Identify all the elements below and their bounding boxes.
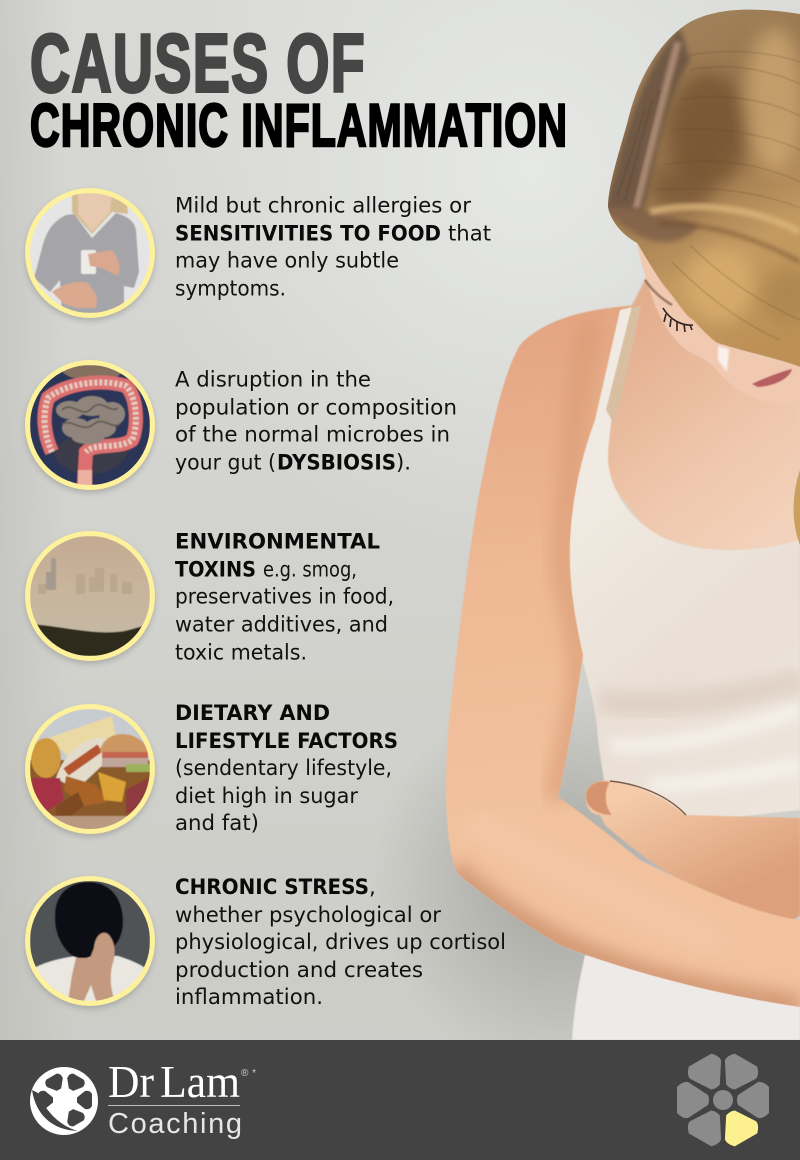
text: item 3: preservatives in food, (175, 584, 394, 610)
text: item 1: may have only subtle (175, 248, 399, 274)
text: item 5: , (369, 875, 376, 900)
text: item 2: ). (396, 450, 411, 475)
text: item 2: population or composition (175, 395, 457, 420)
text: item 4: diet high in sugar (175, 784, 358, 809)
woman: eyelashes (663, 308, 693, 332)
title line: chronic inflammation: CHRONIC INFLAMMATION (30, 92, 568, 159)
item 3: environmental toxins (25, 530, 394, 666)
icon: Dr Lam flower disc (30, 1067, 98, 1135)
woman: shoulder, arm and front forearm (446, 305, 800, 1007)
icon: woman with glass of milk (25, 188, 155, 321)
icon: stressed person holding head (25, 876, 155, 1009)
text: item 2: of the normal microbes in (175, 422, 450, 447)
text: item 3: toxic metals. (175, 640, 307, 666)
icon: colon and intestines (25, 360, 155, 493)
item 4: dietary and lifestyle factors (25, 701, 398, 837)
text: item 1: symptoms. (175, 276, 286, 302)
woman: nose highlight (718, 346, 729, 372)
text: item 4: and fat) (175, 811, 259, 836)
text: item 3: TOXINS (175, 558, 256, 582)
text: item 4: LIFESTYLE FACTORS (175, 729, 398, 754)
text: item 2: DYSBIOSIS (277, 450, 396, 475)
woman: hair lock on right edge (794, 470, 800, 545)
text: item 5: whether psychological or (175, 903, 441, 928)
woman: lips (752, 369, 792, 387)
text: item 3 (175, 530, 394, 666)
text: item 3: water additives, and (175, 612, 388, 638)
woman: top waist shadow (600, 680, 800, 704)
title (30, 16, 568, 159)
text: item 2 (175, 367, 457, 475)
text: item 5: production and creates (175, 958, 423, 983)
text: item 5 (175, 875, 506, 1010)
text: item 3: e.g. smog, (263, 558, 357, 582)
woman: brow (645, 280, 672, 305)
text: item 4 (175, 701, 398, 836)
text: item 2: A disruption in the (175, 367, 371, 392)
text: item 4: DIETARY AND (175, 701, 330, 726)
woman: hidden forearm and hand (586, 780, 800, 921)
item 2: dysbiosis (25, 360, 457, 493)
woman: top folds (610, 710, 800, 785)
text: item 5: CHRONIC STRESS (175, 875, 369, 900)
logo: Dr Lam Coaching (30, 1056, 256, 1140)
woman: bra strap (606, 306, 641, 424)
logo text: Coaching: Coaching (108, 1108, 242, 1140)
woman: tank top (570, 306, 800, 822)
woman: chest and neck (590, 270, 800, 556)
text: item 5: physiological, drives up cortisol (175, 930, 506, 955)
woman: hair (600, 0, 800, 380)
icon: smog over city (25, 531, 155, 664)
text: item 1: SENSITIVITIES TO FOOD (175, 222, 441, 246)
logo text: Dr Lam: Dr Lam (108, 1056, 240, 1107)
text: item 2: your gut ( (175, 450, 276, 475)
text: item 1 (175, 194, 491, 302)
item 1: food sensitivities (25, 188, 491, 321)
text: item 1: Mild but chronic allergies or (175, 194, 471, 218)
item 5: chronic stress (25, 875, 506, 1010)
woman: fold of top over hand (610, 781, 686, 815)
woman: face (637, 243, 800, 406)
title line: causes of: CAUSES OF (30, 16, 366, 110)
text: item 3: ENVIRONMENTAL (175, 530, 380, 554)
photo: woman holding stomach (446, 0, 800, 1040)
text: item 1: that (448, 222, 491, 246)
logo mark: registered: ®* (241, 1068, 256, 1079)
icon: six-petal flower (677, 1051, 769, 1149)
text: item 5: inflammation. (175, 985, 323, 1010)
woman: lower top (572, 955, 800, 1040)
woman: thumb (586, 781, 612, 815)
text: item 4: (sendentary lifestyle, (175, 756, 392, 781)
footer bar (0, 1040, 800, 1160)
icon: fast food plate (25, 704, 155, 837)
